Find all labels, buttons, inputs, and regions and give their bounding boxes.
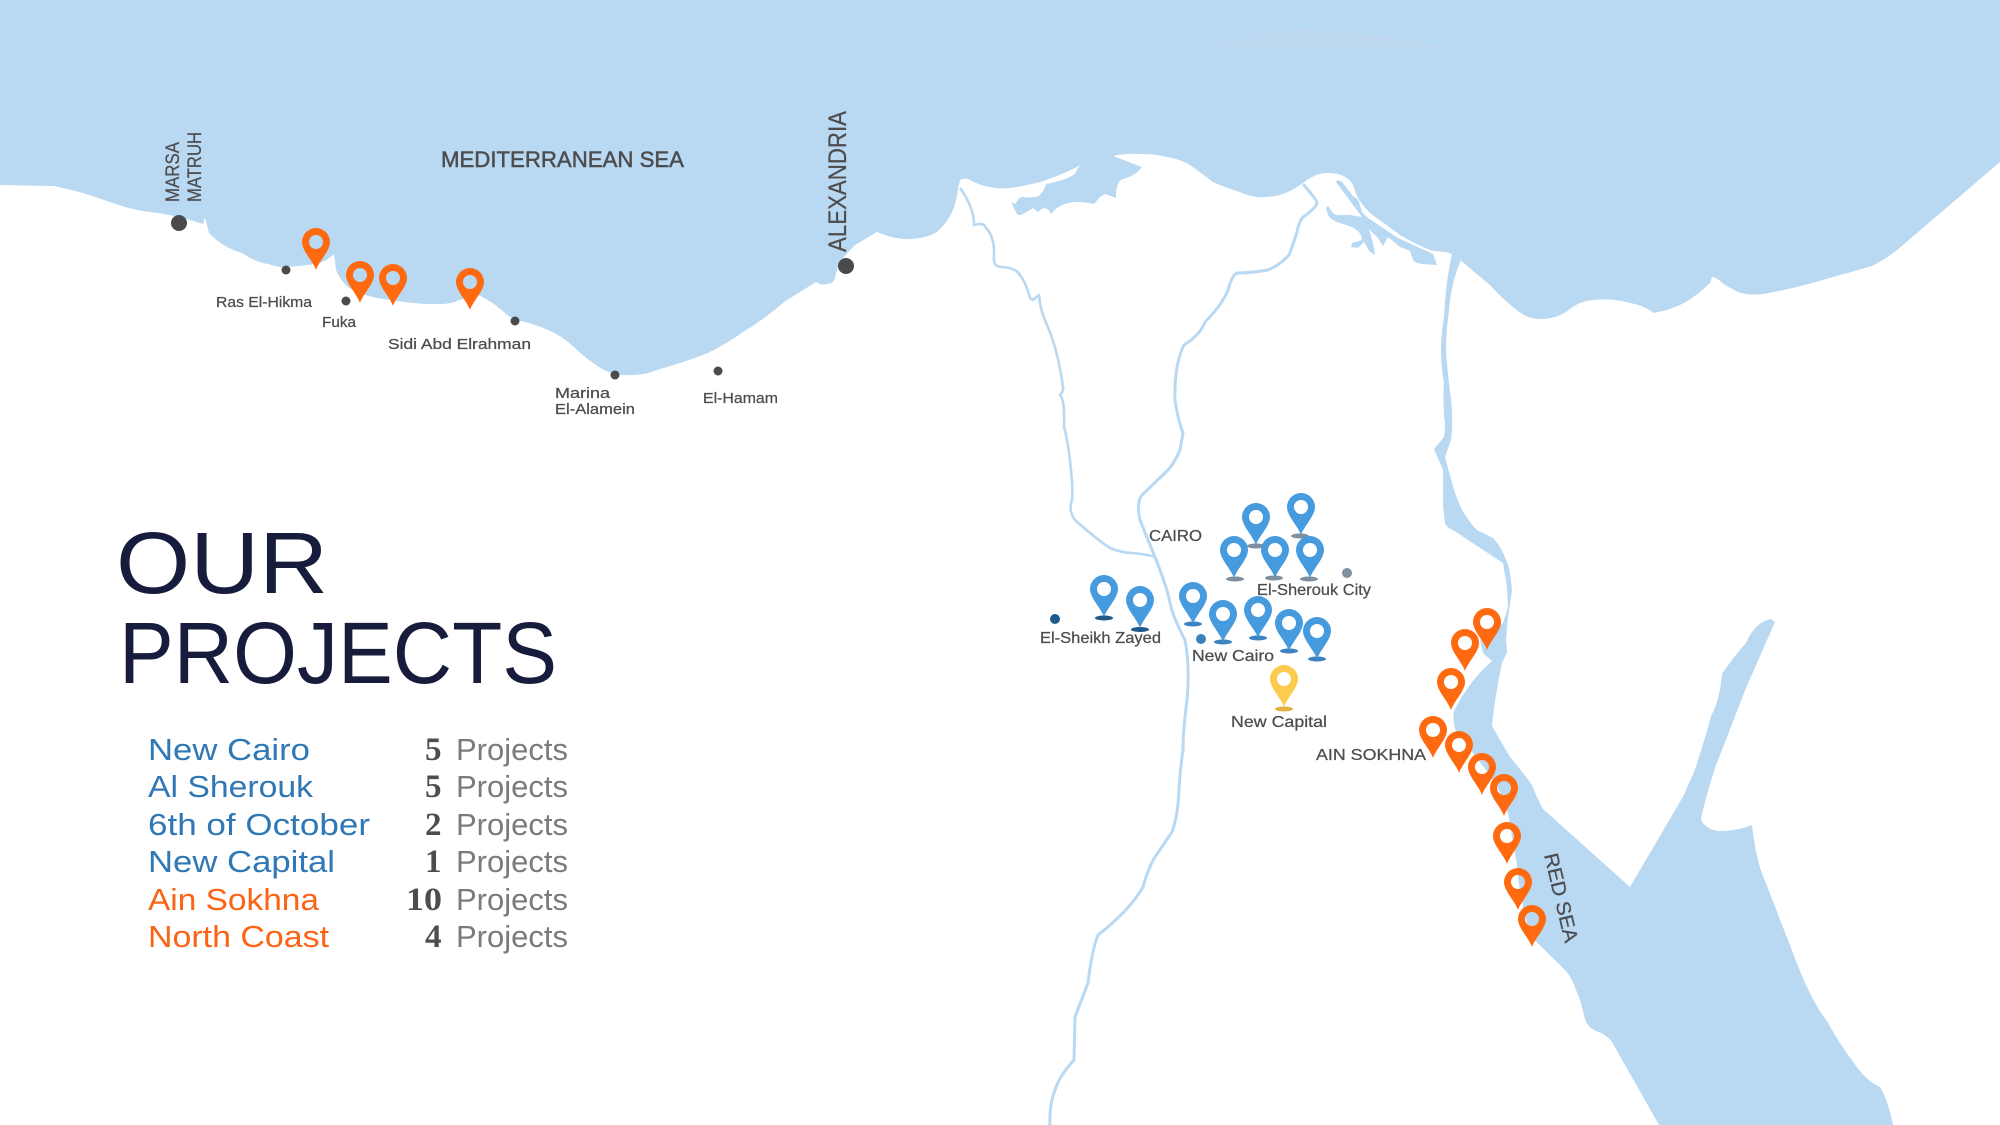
label: Marsa Matruh (163, 132, 206, 202)
legend: project counts (148, 732, 568, 955)
Lake Manzala (1326, 180, 1437, 265)
dot: Ras El-Hikma (282, 266, 290, 274)
Mediterranean Sea (0, 0, 2000, 375)
title: PROJECTS (119, 605, 557, 702)
title (116, 515, 557, 702)
label: New Cairo: New Cairo (1192, 648, 1274, 665)
pins: North Coast (302, 228, 484, 310)
row: 6th of October: 2 (425, 807, 442, 843)
row: Al Sherouk: 5 (425, 769, 442, 805)
label: Marsa Matruh: MARSA (163, 142, 184, 202)
label: Ain Sokhna: AIN SOKHNA (1316, 747, 1426, 764)
pins: Ain Sokhna (1419, 608, 1546, 947)
row: North Coast: Projects (456, 919, 568, 954)
row: Al Sherouk: Al Sherouk (148, 769, 314, 804)
label: El-Sheikh Zayed: El-Sheikh Zayed (1040, 630, 1161, 647)
row: New Cairo: Projects (456, 732, 568, 767)
row: New Capital: New Capital (148, 844, 335, 879)
row: New Cairo: 5 (425, 732, 442, 768)
dot: Alexandria (838, 258, 854, 274)
label: El-Hamam: El-Hamam (703, 391, 778, 407)
label: Marina El-Alamein (555, 386, 635, 418)
pins: El-Sheikh Zayed (1090, 575, 1154, 632)
dot: Marina (610, 370, 620, 380)
row: North Coast: 4 (425, 919, 442, 955)
label: Cairo: CAIRO (1149, 528, 1202, 545)
sea highlight (1201, 28, 1461, 50)
row: New Capital (148, 844, 568, 880)
label: Mediterranean Sea: MEDITERRANEAN SEA (441, 147, 684, 172)
title: OUR (116, 515, 328, 612)
River Nile east branch (1050, 184, 1317, 1125)
row: Ain Sokhna: Projects (456, 882, 568, 917)
row: Ain Sokhna (148, 882, 568, 918)
row: New Capital: Projects (456, 844, 568, 879)
label: El-Sherouk City: El-Sherouk City (1257, 582, 1371, 599)
label: Marsa Matruh: MATRUH (185, 132, 206, 202)
dot: El-Sheikh Zayed (1050, 614, 1060, 624)
label: Marina El-Alamein: Marina (555, 386, 611, 402)
row: Ain Sokhna: 10 (406, 882, 442, 918)
row: New Capital: 1 (425, 844, 442, 880)
label: Alexandria: ALEXANDRIA (824, 111, 852, 252)
row: 6th of October: 6th of October (148, 807, 370, 842)
row: North Coast (148, 919, 568, 955)
River Nile west branch (960, 188, 1155, 557)
label: Marina El-Alamein: El-Alamein (555, 402, 635, 418)
Suez Canal and Red Sea (1434, 254, 1893, 1125)
label: Red Sea: RED SEA (1539, 851, 1582, 945)
dot: Sidi Abd Elrahman (510, 316, 520, 326)
row: Al Sherouk (148, 769, 568, 805)
label: Fuka: Fuka (322, 315, 357, 331)
row: 6th of October (148, 807, 568, 843)
label: New Capital: New Capital (1231, 714, 1327, 731)
pin: New Capital (1270, 665, 1298, 712)
pins: New Cairo (1179, 582, 1331, 662)
dot: El-Hamam (714, 366, 722, 376)
row: Al Sherouk: Projects (456, 769, 568, 804)
row: North Coast: North Coast (148, 919, 329, 954)
row: Ain Sokhna: Ain Sokhna (148, 882, 320, 917)
dot: Fuka (342, 296, 350, 306)
row: New Cairo: New Cairo (148, 732, 310, 767)
label: Sidi Abd Elrahman: Sidi Abd Elrahman (388, 337, 531, 353)
pins: El-Sherouk City (1220, 493, 1324, 582)
row: New Cairo (148, 732, 568, 768)
row: 6th of October: Projects (456, 807, 568, 842)
dot: El-Sherouk City (1342, 568, 1352, 578)
dot: New Cairo (1196, 634, 1206, 644)
label: Ras El-Hikma: Ras El-Hikma (216, 295, 313, 311)
dot: Marsa Matruh (171, 215, 187, 231)
